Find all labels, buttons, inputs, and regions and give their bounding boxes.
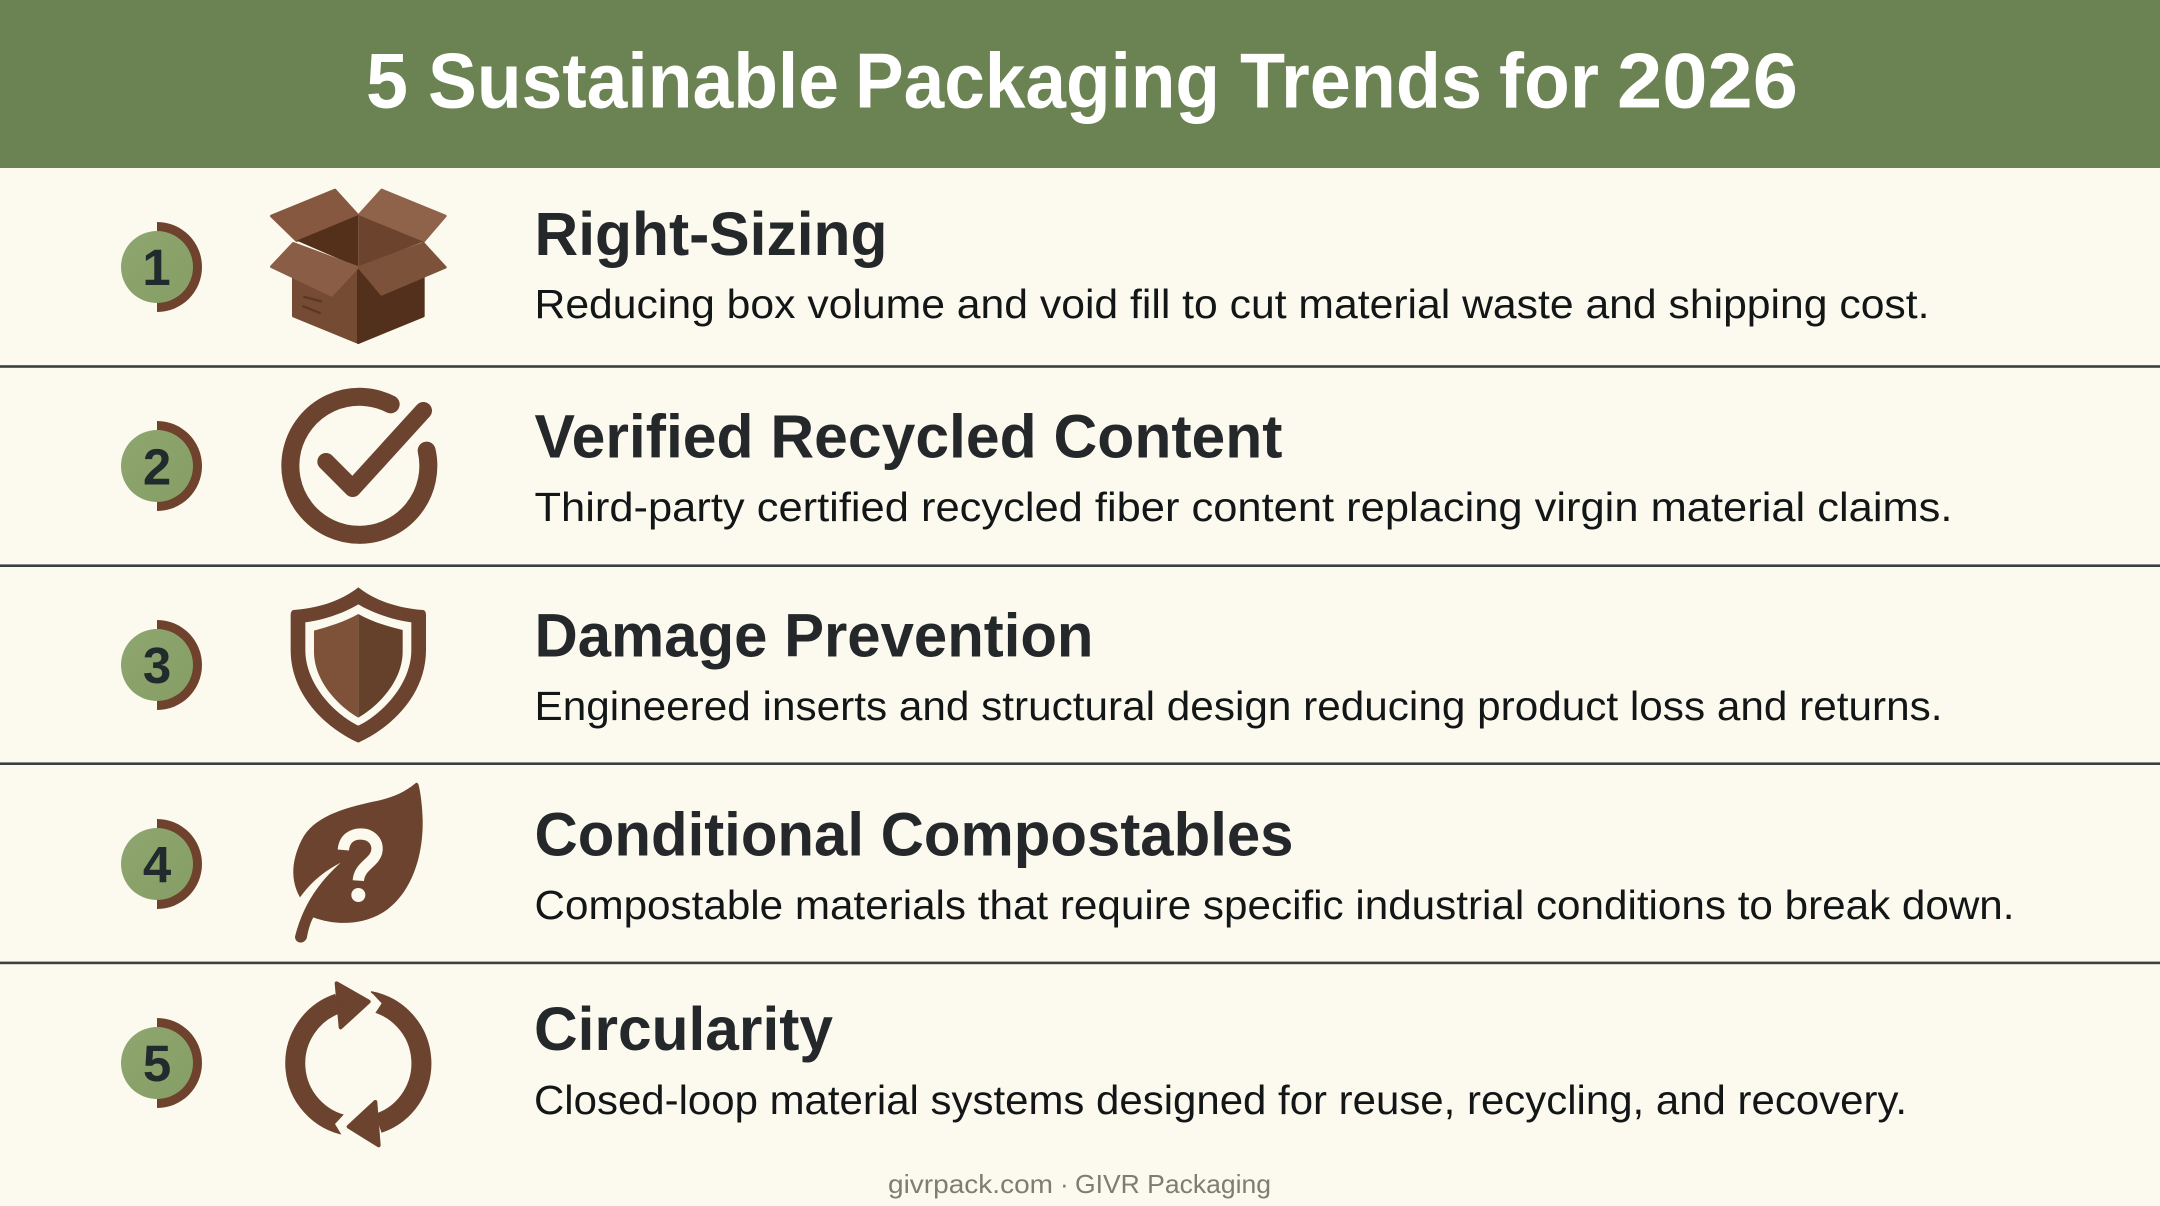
number badge 5: 5 [143, 1035, 171, 1092]
heading: Conditional Compostables [534, 800, 1294, 868]
title: Sustainable [428, 36, 839, 124]
heading: Right-Sizing [534, 200, 888, 268]
title: Packaging [855, 36, 1220, 124]
footer credit: GIVR Packaging [1075, 1169, 1271, 1199]
description: Compostable materials that require specific industrial conditions to break down. [534, 882, 2014, 928]
title: for [1499, 36, 1599, 124]
icon: circular arrows [295, 983, 421, 1145]
description: Engineered inserts and structural design reducing product loss and returns. [534, 683, 1942, 729]
number badge 4 [121, 819, 202, 909]
icon: check mark in circle [290, 397, 428, 535]
panel: trend 3 damage prevention [121, 587, 1942, 743]
title banner [0, 0, 2160, 168]
heading: Damage Prevention [534, 602, 1094, 670]
number badge 4: 4 [143, 836, 172, 893]
title: Trends [1240, 36, 1482, 124]
title [366, 36, 1798, 124]
footer credit [888, 1169, 1271, 1199]
icon: shield [291, 587, 426, 743]
title: 2026 [1617, 36, 1798, 124]
panel: trend 4 conditional compostables [121, 783, 2014, 943]
panel: trend 1 right-sizing [121, 190, 1929, 343]
description: Reducing box volume and void fill to cut material waste and shipping cost. [534, 281, 1929, 327]
number badge 3: 3 [143, 637, 171, 694]
footer credit: · [1060, 1169, 1069, 1199]
icon: leaf with question mark [293, 783, 423, 943]
footer credit: givrpack.com [888, 1169, 1053, 1199]
number badge 2: 2 [143, 438, 171, 496]
number badge 5 [121, 1018, 202, 1108]
panel: trend 2 verified recycled content [121, 397, 1952, 535]
title: 5 [366, 36, 408, 124]
icon: open cardboard box [271, 190, 445, 343]
number badge 1: 1 [142, 239, 171, 296]
panel: trend 5 circularity [121, 983, 1907, 1145]
number badge 1 [121, 222, 202, 312]
description: Third-party certified recycled fiber content replacing virgin material claims. [534, 484, 1952, 530]
number badge 2 [121, 421, 202, 511]
heading: Circularity [534, 995, 833, 1063]
heading: Verified Recycled Content [534, 402, 1282, 470]
number badge 3 [121, 620, 202, 710]
description: Closed-loop material systems designed for reuse, recycling, and recovery. [534, 1077, 1907, 1123]
